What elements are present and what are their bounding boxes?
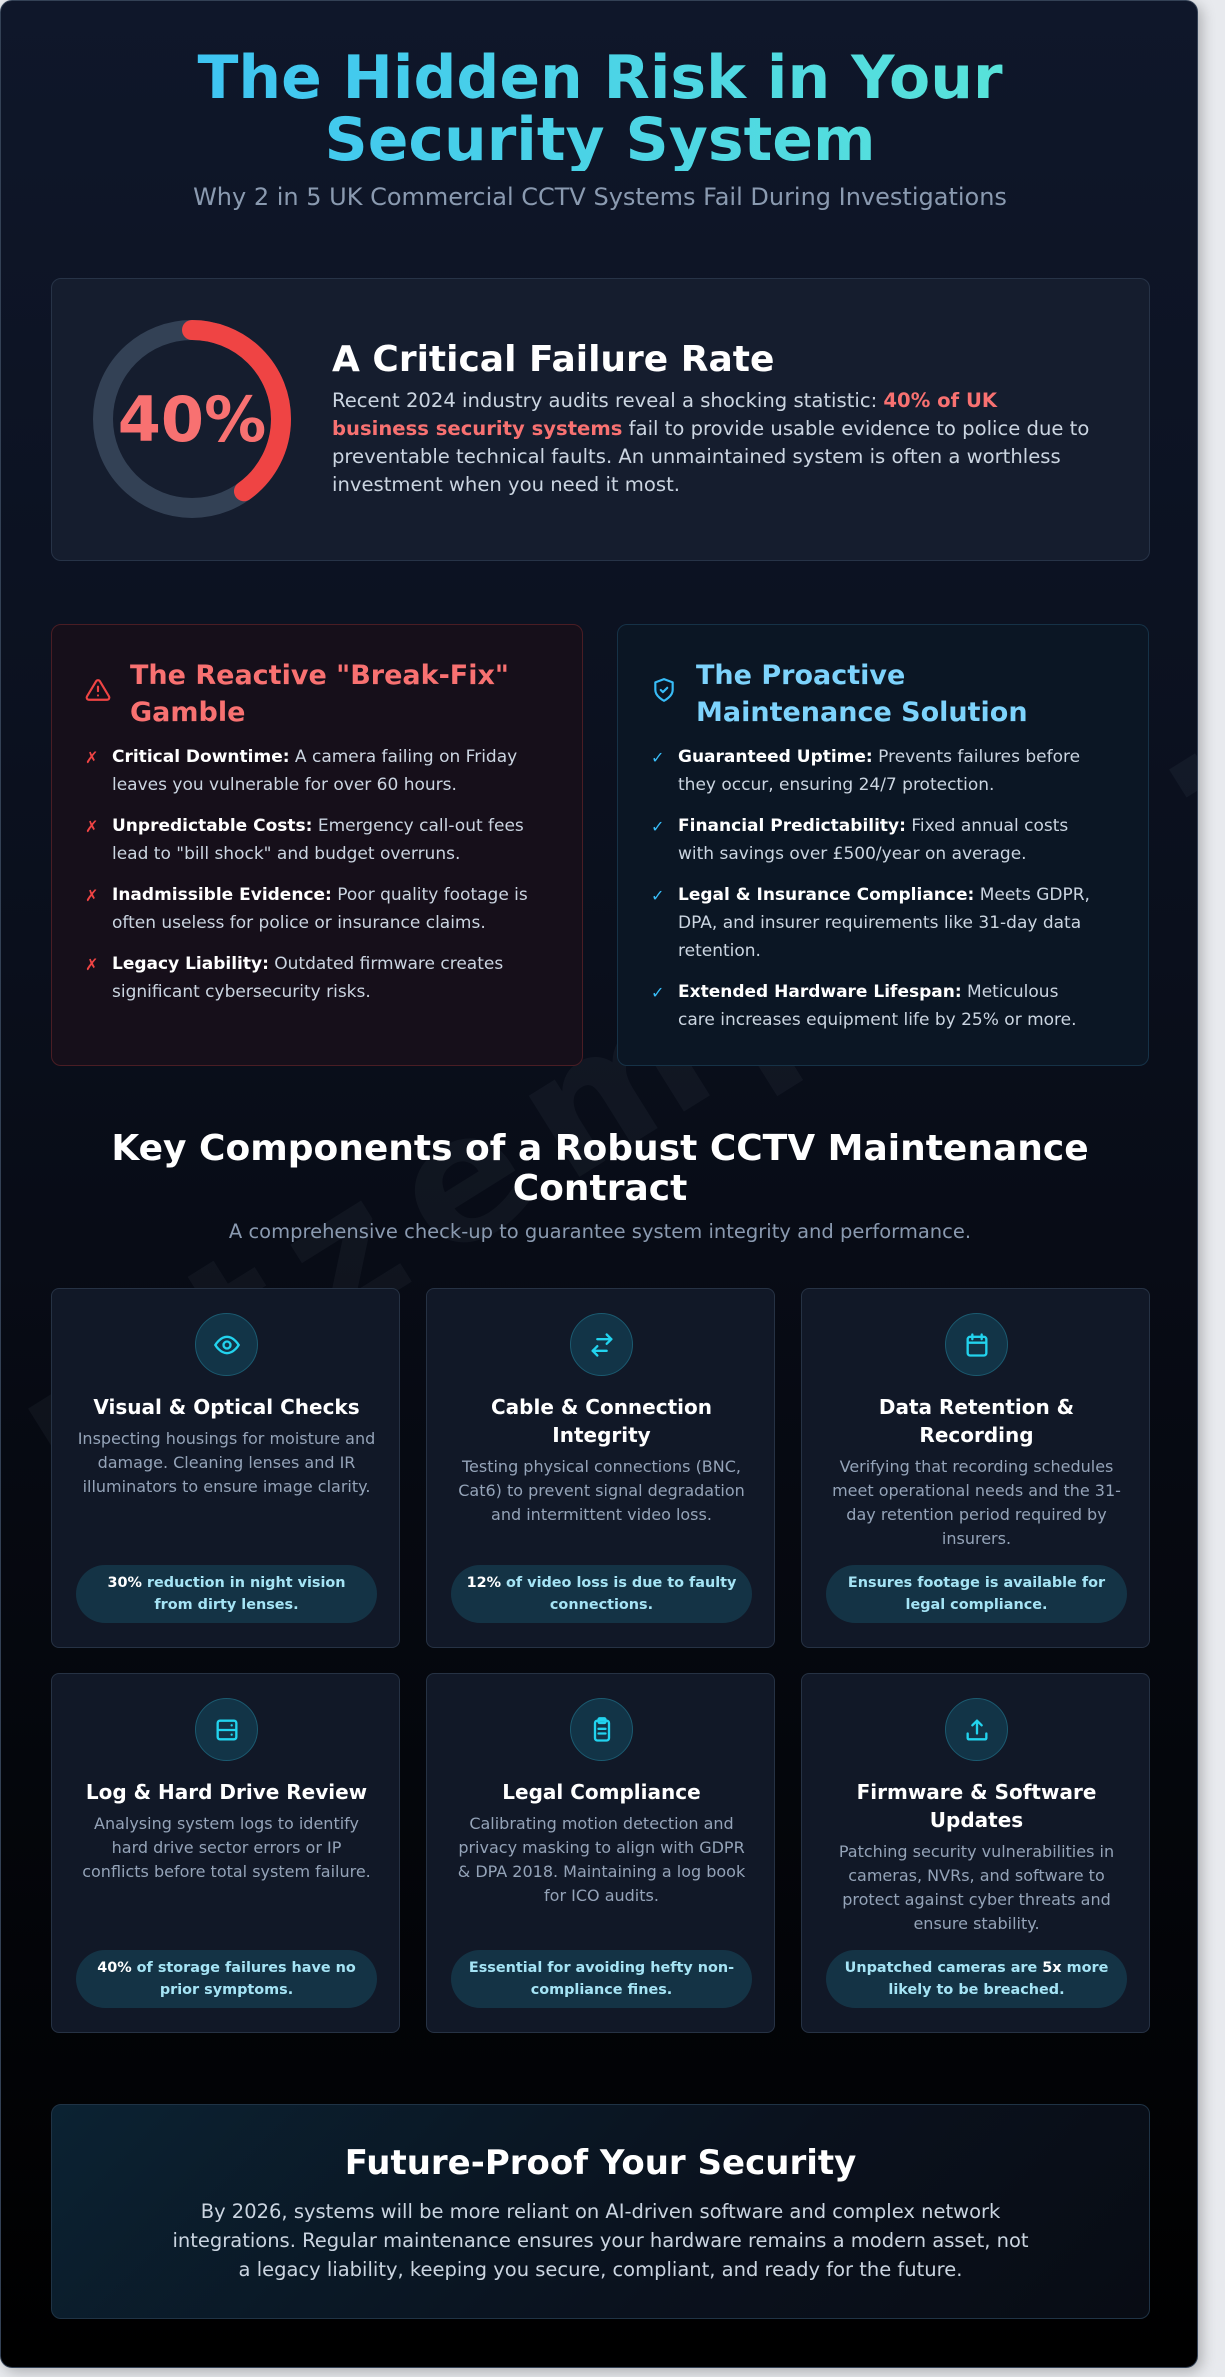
text: cable title & desc [458, 1395, 745, 1524]
panel: future-proof [51, 2104, 1150, 2319]
text: future-proof paragraph: By 2026, systems will be more reliant on AI-driven software and complex network [201, 2200, 1000, 2223]
text: data title & desc [832, 1395, 1121, 1548]
heading: reactive: The Reactive "Break-Fix" [130, 660, 509, 691]
list: reactive risks: ✗ [85, 748, 98, 767]
text: firmware title & desc: protect against cyber threats and [842, 1890, 1111, 1909]
subtitle: Why 2 in 5 UK Commercial CCTV Systems Fail During Investigations [193, 183, 1007, 211]
card: data retention [801, 1288, 1150, 1648]
text: legal title & desc [458, 1780, 746, 1905]
text: cable title & desc: Cable & Connection [491, 1395, 712, 1419]
badge [76, 1565, 377, 1623]
text: data title & desc: day retention period required by [846, 1505, 1107, 1524]
icon: eye [195, 1313, 258, 1376]
list: reactive risks: Critical Downtime: A camera failing on Friday leaves you vulnerable for over 60 hours. [112, 747, 517, 795]
badge [451, 1950, 752, 2008]
list: proactive benefits [651, 747, 1090, 1030]
badge: Essential for avoiding hefty non- [469, 1960, 734, 1976]
icon: arrows [570, 1313, 633, 1376]
icon: server [195, 1698, 258, 1761]
heading: proactive [696, 660, 1028, 728]
list: proactive benefits: Financial Predictability: Fixed annual costs with savings over £500/year on average. [678, 816, 1068, 864]
text: cable title & desc: Cat6) to prevent signal degradation [458, 1481, 745, 1500]
list: reactive risks: Unpredictable Costs: Emergency call-out fees lead to "bill shock" and budget overruns. [112, 816, 524, 864]
list: reactive risks: ✗ [85, 955, 98, 974]
text: failure rate description: preventable technical faults. An unmaintained system is often a worthless [332, 445, 1061, 468]
text: legal title & desc: for ICO audits. [544, 1886, 659, 1905]
text: firmware title & desc: Patching security vulnerabilities in [839, 1842, 1114, 1861]
text: future-proof paragraph: a legacy liability, keeping you secure, compliant, and ready for the future. [239, 2258, 962, 2281]
text: failure rate description: Recent 2024 industry audits reveal a shocking statistic: 40% of UK [332, 389, 997, 412]
text: firmware title & desc: ensure stability. [913, 1914, 1040, 1933]
panel: proactive maintenance [617, 624, 1149, 1066]
text: future-proof paragraph [172, 2200, 1029, 2281]
text: cable title & desc: Integrity [552, 1423, 651, 1447]
badge: compliance fines. [531, 1982, 672, 1998]
badge: likely to be breached. [888, 1982, 1065, 1998]
text: firmware title & desc: Updates [930, 1808, 1023, 1832]
heading: key components [111, 1128, 1089, 1209]
list: reactive risks: Inadmissible Evidence: Poor quality footage is often useless for police or insurance claims. [112, 885, 528, 933]
text: legal title & desc: Calibrating motion detection and [469, 1814, 734, 1833]
list: proactive benefits: ✓ [651, 748, 664, 767]
icon: calendar [945, 1313, 1008, 1376]
heading: reactive [130, 660, 509, 728]
text: log title & desc: hard drive sector errors or IP [112, 1838, 341, 1857]
heading: critical failure rate: A Critical Failure Rate [332, 339, 774, 380]
text: visual title & desc: Inspecting housings for moisture and [78, 1429, 375, 1448]
text: data title & desc: Verifying that recording schedules [840, 1457, 1113, 1476]
card: firmware [801, 1673, 1150, 2033]
text: legal title & desc: Legal Compliance [502, 1780, 701, 1804]
panel: critical failure rate [51, 278, 1150, 561]
badge: 40% of storage failures have no [97, 1960, 356, 1976]
text: legal title & desc: privacy masking to align with GDPR [458, 1838, 745, 1857]
text: cable title & desc: and intermittent video loss. [491, 1505, 712, 1524]
list: reactive risks: ✗ [85, 886, 98, 905]
chart: 40% donut ring [93, 320, 291, 518]
heading: key components: Key Components of a Robust CCTV Maintenance [111, 1128, 1089, 1169]
text: log title & desc: Analysing system logs to identify [94, 1814, 359, 1833]
badge [451, 1565, 752, 1623]
text: failure rate description: investment when you need it most. [332, 473, 680, 496]
text: log title & desc: conflicts before total system failure. [82, 1862, 371, 1881]
list: proactive benefits: Legal & Insurance Compliance: Meets GDPR, DPA, and insurer requirements like 31-day data retention. [678, 885, 1090, 961]
text: data title & desc: Recording [919, 1423, 1034, 1447]
badge: connections. [550, 1597, 653, 1613]
text: future-proof paragraph: integrations. Regular maintenance ensures your hardware remains a modern asset, not [172, 2229, 1029, 2252]
badge: 12% of video loss is due to faulty [467, 1575, 736, 1591]
card: cable & connection [426, 1288, 775, 1648]
text: visual title & desc [78, 1395, 375, 1496]
text: firmware title & desc [839, 1780, 1114, 1933]
heading: key components: Contract [513, 1168, 687, 1209]
text: log title & desc [82, 1780, 371, 1881]
text: log title & desc: Log & Hard Drive Review [86, 1780, 367, 1804]
heading: proactive: Maintenance Solution [696, 697, 1028, 728]
text: failure rate description: business security systems fail to provide usable evidence to police due to [332, 417, 1089, 440]
badge: 30% reduction in night vision [107, 1575, 346, 1591]
card: visual & optical [51, 1288, 400, 1648]
badge [76, 1950, 377, 2008]
text: cable title & desc: Testing physical connections (BNC, [462, 1457, 741, 1476]
badge: Ensures footage is available for [848, 1575, 1105, 1591]
card: legal compliance [426, 1673, 775, 2033]
icon: shield [654, 678, 674, 702]
text: data title & desc: meet operational needs and the 31- [832, 1481, 1121, 1500]
panel: reactive break-fix [51, 624, 583, 1066]
badge: prior symptoms. [160, 1982, 293, 1998]
subtitle: key components: A comprehensive check-up to guarantee system integrity and performance. [229, 1220, 971, 1243]
list: reactive risks [85, 747, 528, 1002]
card: log & hard drive [51, 1673, 400, 2033]
list: proactive benefits: ✓ [651, 983, 664, 1002]
text: failure rate description [332, 389, 1089, 496]
badge: from dirty lenses. [154, 1597, 299, 1613]
icon: clipboard [570, 1698, 633, 1761]
text: data title & desc: Data Retention & [879, 1395, 1074, 1419]
badge [826, 1950, 1127, 2008]
text: legal title & desc: & DPA 2018. Maintaining a log book [458, 1862, 745, 1881]
heading: proactive: The Proactive [696, 660, 905, 691]
list: proactive benefits: ✓ [651, 886, 664, 905]
list: proactive benefits: Guaranteed Uptime: Prevents failures before they occur, ensuring 24/7 protection. [678, 747, 1080, 795]
icon: upload [945, 1698, 1008, 1761]
list: proactive benefits: ✓ [651, 817, 664, 836]
list: proactive benefits: Extended Hardware Lifespan: Meticulous care increases equipment life by 25% or more. [678, 982, 1077, 1030]
text: visual title & desc: damage. Cleaning lenses and IR [98, 1453, 355, 1472]
badge: legal compliance. [906, 1597, 1047, 1613]
icon: warning [86, 679, 110, 701]
heading: future-proof: Future-Proof Your Security [345, 2143, 856, 2183]
list: reactive risks: ✗ [85, 817, 98, 836]
title: Security System [325, 105, 875, 175]
title: The Hidden Risk in Your [197, 43, 1003, 113]
list: reactive risks: Legacy Liability: Outdated firmware creates significant cybersecurity risks. [112, 954, 503, 1002]
heading: reactive: Gamble [130, 697, 245, 728]
text: visual title & desc: illuminators to ensure image clarity. [83, 1477, 370, 1496]
badge [826, 1565, 1127, 1623]
title [1, 47, 1199, 171]
text: firmware title & desc: Firmware & Software [857, 1780, 1096, 1804]
text: firmware title & desc: cameras, NVRs, and software to [848, 1866, 1105, 1885]
chart: 40% donut ring: 40% [118, 383, 266, 456]
text: visual title & desc: Visual & Optical Checks [93, 1395, 360, 1419]
badge: Unpatched cameras are 5x more [845, 1960, 1108, 1976]
text: data title & desc: insurers. [942, 1529, 1011, 1548]
